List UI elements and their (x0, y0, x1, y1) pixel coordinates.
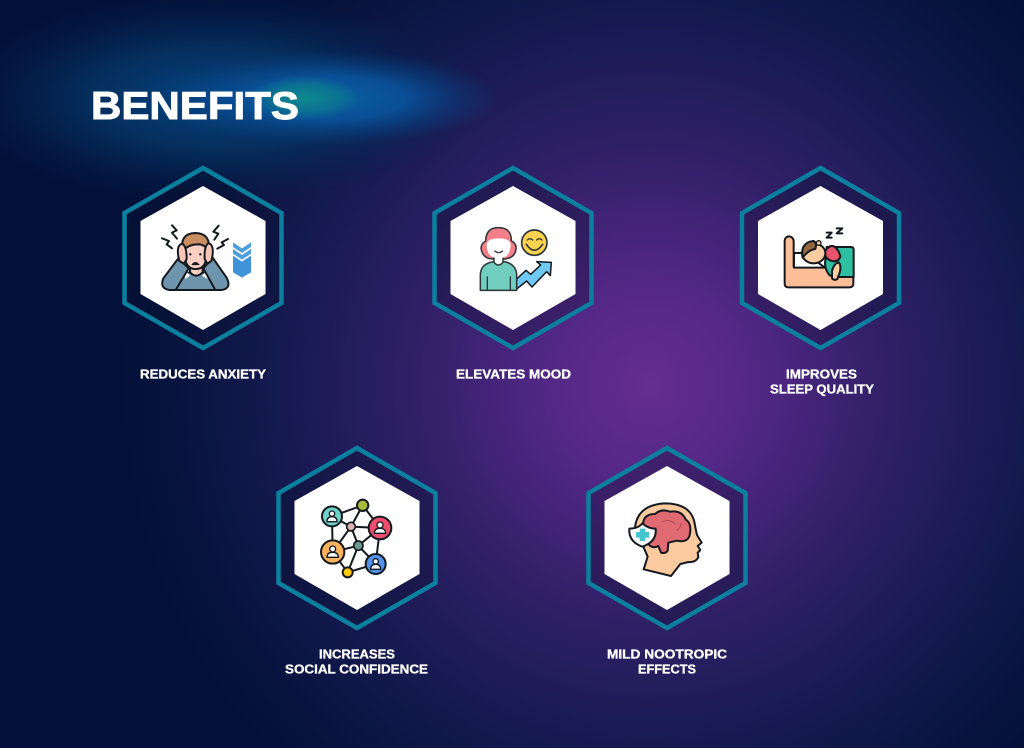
panel: elevates mood (434, 168, 592, 382)
label: MILD NOOTROPIC (607, 648, 727, 662)
panel: increases social confidence (278, 448, 436, 676)
title: BENEFITS (91, 85, 299, 128)
label: IMPROVES (786, 368, 857, 382)
hexagon frame (742, 168, 899, 348)
icon: head with brain and shield (629, 503, 702, 576)
label: SOCIAL CONFIDENCE (285, 662, 428, 676)
label: INCREASES (319, 648, 395, 662)
label: EFFECTS (638, 662, 696, 676)
icon: smiling woman with rising arrow (480, 228, 551, 290)
label (285, 648, 428, 676)
icon: social network graph (321, 500, 391, 577)
panel: reduces anxiety (124, 168, 282, 382)
icon: person sleeping in bed (785, 228, 854, 287)
hexagon frame (124, 168, 282, 348)
panel: mild nootropic effects (588, 448, 746, 676)
icon: stressed person with downward chevrons (162, 225, 251, 290)
label (607, 648, 727, 676)
label: SLEEP QUALITY (770, 382, 875, 396)
panel: improves sleep quality (742, 168, 899, 396)
label (770, 368, 875, 396)
hexagon frame (588, 448, 746, 628)
label: REDUCES ANXIETY (140, 368, 267, 382)
hexagon frame (278, 448, 436, 628)
label: ELEVATES MOOD (456, 368, 571, 382)
hexagon frame (434, 168, 592, 348)
